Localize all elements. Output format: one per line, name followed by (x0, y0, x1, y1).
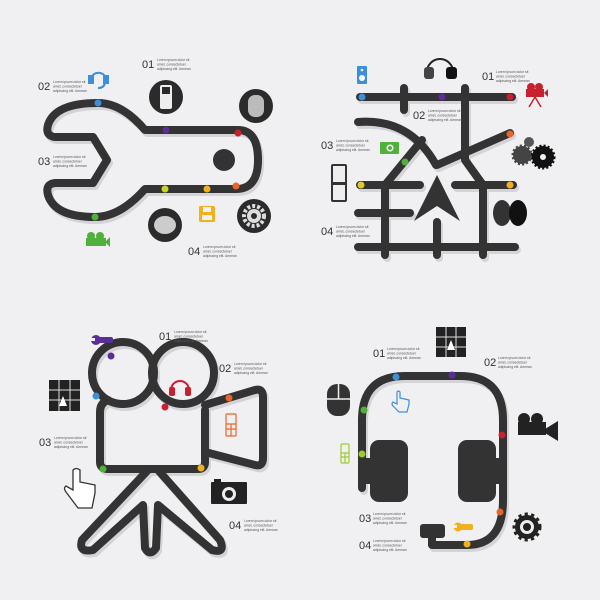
icon: hand cursor (64, 468, 95, 508)
text 01 (142, 58, 191, 71)
wrench dots (92, 100, 242, 220)
icon: mouse (327, 384, 350, 416)
icon: green photo camera (380, 142, 399, 154)
text 01: 01 (159, 331, 171, 343)
icon: yellow wrench (452, 522, 473, 532)
icon: green video camera (86, 232, 110, 247)
text 04 (229, 519, 278, 532)
text 02: 02 (413, 110, 425, 122)
text 02 (38, 80, 87, 93)
text 04: 04 (321, 226, 333, 238)
text 04: 04 (229, 520, 241, 532)
camera dots (92, 352, 232, 472)
text 04 (359, 539, 407, 552)
icon: blue hand (392, 391, 409, 412)
map roads (358, 88, 517, 258)
icon: mobile circle (149, 80, 183, 114)
icon: headphones (424, 59, 457, 79)
icon: gear (515, 515, 539, 539)
text 02: 02 (219, 363, 231, 375)
text 01 (159, 330, 208, 343)
text 03: 03 (38, 156, 50, 168)
text 02 (413, 109, 462, 122)
icon: headset blue (89, 73, 108, 88)
text 04 (321, 225, 370, 238)
text 04: 04 (359, 540, 371, 552)
icon: blue speaker (357, 66, 367, 84)
text 01 (482, 70, 530, 83)
icon: brain (493, 200, 527, 226)
icon: gear circle (237, 199, 271, 233)
icon: red headphones (169, 381, 191, 396)
camera road (81, 342, 265, 556)
icon: mouse circle (239, 89, 273, 123)
panel: headset (327, 327, 558, 552)
text 03: 03 (321, 140, 333, 152)
icon: purple wrench (90, 335, 113, 345)
icon: arrow (414, 175, 460, 221)
icon: video camera (518, 413, 558, 441)
icon: floppy (199, 206, 215, 222)
text 01: 01 (482, 71, 494, 83)
text 02: 02 (38, 81, 50, 93)
wrench road (47, 103, 260, 220)
icon: gears (513, 137, 554, 168)
map dots (358, 94, 514, 188)
text 03 (321, 139, 370, 152)
panel: video camera (39, 330, 278, 556)
icon: brain circle (148, 208, 182, 242)
text 01: 01 (142, 59, 154, 71)
panel: wrench (38, 58, 273, 258)
text 02 (484, 356, 532, 369)
text 03: 03 (39, 437, 51, 449)
text 04: 04 (188, 246, 200, 258)
text 01 (373, 347, 421, 360)
panel: map (321, 59, 554, 258)
text 02 (219, 362, 268, 375)
text 02: 02 (484, 357, 496, 369)
text 03 (39, 436, 88, 449)
icon: green phone (341, 444, 349, 463)
headband road (362, 376, 505, 548)
text 03 (359, 512, 407, 525)
icon: phone (331, 164, 347, 202)
headset dots (358, 372, 506, 548)
microphone (420, 524, 445, 546)
text 04 (188, 245, 237, 258)
text 03 (38, 155, 87, 168)
icon: photo camera (211, 479, 247, 504)
icon: map (436, 327, 466, 357)
text 03: 03 (359, 513, 371, 525)
text 01: 01 (373, 348, 385, 360)
ear cups (362, 440, 504, 502)
icon: red camera (526, 83, 548, 107)
icon: orange phone (226, 414, 236, 436)
icon: map (49, 380, 80, 411)
